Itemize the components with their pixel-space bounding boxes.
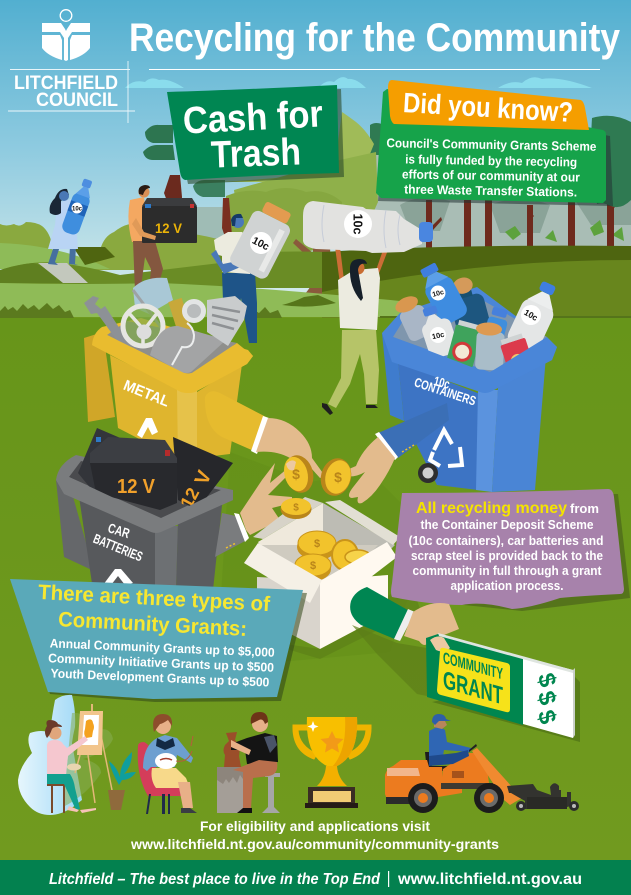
grant list: Youth Development Grants up to $500 bbox=[50, 666, 270, 690]
navy bottle bbox=[444, 274, 492, 339]
heading: cash for trash: Trash bbox=[210, 131, 302, 177]
figure: man carrying battery bbox=[128, 185, 197, 291]
batteries: 12 V bbox=[117, 476, 156, 498]
coin: $ bbox=[292, 466, 300, 482]
footer text bbox=[49, 871, 582, 888]
bin label bbox=[412, 373, 478, 409]
logo wordmark bbox=[14, 73, 118, 111]
ticket shadow bbox=[432, 672, 580, 742]
recycling money text bbox=[408, 500, 604, 593]
bin label: BATTERIES bbox=[91, 531, 145, 564]
jar with 10c label: 10c bbox=[250, 235, 271, 253]
ticket label text bbox=[443, 649, 503, 710]
back battery bbox=[78, 428, 125, 490]
bin front rim bbox=[92, 335, 253, 393]
footer text: Litchfield – The best place to live in the Top End bbox=[49, 871, 381, 888]
sage blob bbox=[63, 713, 113, 807]
bin right face bbox=[176, 496, 223, 590]
panel: cash for trash bbox=[167, 85, 344, 184]
grant list: Annual Community Grants up to $5,000 bbox=[50, 636, 275, 660]
figure: man carrying jar bbox=[211, 198, 298, 343]
artist figure bbox=[47, 736, 88, 774]
box right face bbox=[320, 575, 388, 649]
eligibility text bbox=[130, 818, 499, 852]
bin label: 10c bbox=[432, 373, 451, 392]
bottle with 10c label: 10c bbox=[350, 214, 364, 234]
bin centre strip bbox=[476, 390, 498, 492]
batteries bbox=[78, 428, 233, 511]
recycling symbol bbox=[103, 569, 133, 585]
heading: types of grants: There are three types of bbox=[38, 581, 271, 616]
recycling symbol bbox=[430, 430, 462, 466]
back flaps bbox=[253, 497, 323, 539]
potted plant bbox=[108, 752, 136, 810]
coins in box bbox=[295, 531, 371, 581]
wrench bbox=[84, 296, 135, 357]
battery: 12 V bbox=[155, 220, 183, 236]
bin rim back bbox=[56, 455, 233, 532]
arm: yellow sleeve with hand bbox=[205, 391, 325, 478]
vase bbox=[224, 732, 241, 767]
sky background bbox=[0, 0, 631, 300]
bin label: CONTAINERS bbox=[412, 375, 478, 409]
bin left strip bbox=[382, 333, 404, 421]
bin opening bbox=[107, 321, 237, 374]
illustration: artist painting bbox=[18, 695, 136, 815]
did you know body text bbox=[386, 136, 597, 200]
white bottle bbox=[416, 302, 460, 360]
illustration: trophy bbox=[293, 717, 371, 808]
contents: 10c bbox=[432, 289, 445, 299]
recycling money text: (10c containers), car batteries and bbox=[408, 534, 604, 548]
batteries: 12 bbox=[176, 484, 203, 511]
pedestal bbox=[217, 767, 246, 813]
coins in box: $ bbox=[314, 538, 320, 550]
title rule bbox=[149, 69, 600, 70]
bottle bbox=[60, 177, 97, 236]
dollar signs: $ bbox=[532, 688, 561, 709]
background trees bbox=[143, 112, 631, 303]
tree left bbox=[143, 125, 232, 269]
illustration: woman embroidering bbox=[138, 714, 197, 814]
heading: did you know: Did you know? bbox=[402, 87, 574, 128]
bin right face bbox=[197, 364, 242, 458]
bin label: CAR bbox=[106, 520, 132, 541]
box of coins bbox=[244, 497, 420, 659]
bin: 10c containers bbox=[382, 259, 565, 492]
footer bar bbox=[0, 860, 631, 895]
arm: blue sleeve with hand bbox=[342, 403, 449, 503]
bin: car batteries bbox=[56, 428, 233, 590]
bin left face bbox=[398, 362, 480, 490]
bin label bbox=[91, 520, 145, 564]
eligibility text: For eligibility and applications visit bbox=[200, 818, 430, 834]
recycling money text: community in full through a grant bbox=[412, 564, 602, 578]
logo wordmark: LITCHFIELD bbox=[14, 73, 118, 94]
backdrop blob bbox=[18, 695, 82, 815]
figure: woman lifting bottle bbox=[303, 201, 433, 415]
sweater bbox=[143, 735, 193, 771]
tan-capped bottle bbox=[474, 322, 505, 371]
dollar signs bbox=[532, 670, 561, 728]
bucket bbox=[133, 278, 173, 314]
illustration: ride-on mower bbox=[385, 714, 579, 813]
bin left strip bbox=[84, 332, 115, 422]
bin centre strip bbox=[177, 390, 197, 458]
left flap bbox=[244, 543, 322, 603]
gear stack bbox=[207, 296, 247, 346]
bottle with 10c label bbox=[303, 201, 433, 253]
grant list: Community Initiative Grants up to $500 bbox=[48, 651, 274, 675]
contents: 10c bbox=[522, 307, 540, 323]
recycling symbol bbox=[137, 418, 158, 438]
logo emblem bbox=[42, 10, 90, 61]
ticket white section bbox=[523, 657, 573, 738]
ladle bbox=[182, 299, 206, 323]
coins in box: $ bbox=[310, 560, 316, 572]
coin: $ bbox=[293, 502, 299, 514]
contents: 10c bbox=[431, 330, 445, 341]
figure: woman carrying bottle bbox=[48, 177, 97, 265]
bin opening bbox=[69, 461, 221, 518]
front battery bbox=[90, 437, 177, 465]
bin rim bbox=[92, 318, 253, 393]
heading: cash for trash bbox=[182, 93, 324, 177]
stool bbox=[262, 773, 280, 813]
did you know body text: Council's Community Grants Scheme bbox=[386, 136, 597, 154]
bin: metal bbox=[84, 278, 253, 460]
bin label: METAL bbox=[121, 377, 172, 411]
community grant ticket bbox=[426, 633, 580, 742]
bin front rim bbox=[56, 477, 233, 533]
bin left face bbox=[78, 490, 156, 590]
ground layers bbox=[0, 222, 631, 860]
did you know body text: three Waste Transfer Stations. bbox=[404, 182, 577, 200]
logo wordmark: COUNCIL bbox=[36, 90, 118, 111]
box left face bbox=[257, 577, 320, 649]
logo bbox=[8, 10, 135, 123]
arm: green sleeve with hand bbox=[350, 587, 459, 645]
grant list bbox=[47, 636, 275, 690]
recycling money text: the Container Deposit Scheme bbox=[420, 518, 594, 532]
ticket green section bbox=[426, 634, 523, 725]
did you know body text: efforts of our community at our bbox=[402, 167, 580, 185]
arm: grey sleeve with hand bbox=[215, 463, 292, 557]
forest right bbox=[370, 116, 631, 250]
figure: woman carrying bottle: 10c bbox=[72, 206, 83, 212]
red can bbox=[499, 333, 533, 371]
bin centre strip bbox=[155, 526, 178, 590]
dollar signs: $ bbox=[532, 707, 561, 728]
gold coins bbox=[280, 452, 355, 519]
thumb bbox=[430, 636, 450, 652]
needle bbox=[176, 736, 193, 761]
potter bbox=[231, 733, 278, 764]
eligibility text: www.litchfield.nt.gov.au/community/community-grants bbox=[130, 836, 499, 852]
bin front rim bbox=[382, 333, 557, 393]
panel: three types of grants bbox=[10, 579, 307, 702]
mower deck bbox=[507, 783, 579, 811]
right flap bbox=[322, 542, 397, 603]
wheel bbox=[418, 463, 438, 483]
footer text: www.litchfield.nt.gov.au bbox=[397, 871, 582, 888]
pale forest centre bbox=[197, 207, 225, 243]
blue bottle bbox=[415, 259, 470, 327]
embroidery hoop bbox=[155, 753, 177, 769]
did you know banner bbox=[388, 80, 589, 130]
scrap metal bbox=[84, 278, 247, 373]
big white bottle bbox=[504, 277, 565, 356]
beer can bbox=[446, 319, 483, 368]
bin right face bbox=[492, 356, 546, 492]
wheel bbox=[122, 305, 164, 347]
coin: $ bbox=[334, 469, 342, 485]
did you know body text: is fully funded by the recycling bbox=[405, 153, 577, 170]
arm shadow bbox=[352, 625, 427, 696]
thumb over coin bbox=[286, 460, 296, 470]
iron bbox=[150, 326, 226, 373]
ticket top edge bbox=[438, 633, 573, 673]
palette bbox=[67, 764, 81, 770]
mower body bbox=[385, 760, 462, 800]
bin opening bbox=[393, 297, 547, 372]
bin rim bbox=[382, 287, 557, 392]
wheel bbox=[474, 783, 504, 813]
box shadow bbox=[257, 579, 420, 659]
logo frame lines bbox=[8, 61, 135, 123]
legs bbox=[178, 782, 193, 808]
bin left strip bbox=[56, 480, 94, 571]
easel bbox=[75, 730, 112, 803]
recycling money text: application process. bbox=[450, 579, 564, 593]
recycling money text: All recycling money bbox=[416, 500, 567, 517]
inner walls bbox=[258, 503, 323, 593]
panel: recycling money bbox=[391, 489, 630, 611]
tree trunk centre bbox=[293, 239, 343, 303]
ticket label bbox=[437, 648, 510, 712]
ticket label text: GRANT bbox=[443, 666, 503, 710]
grey bottle bbox=[393, 292, 435, 343]
recycling money text: from bbox=[570, 501, 599, 516]
small blue bottle bbox=[483, 306, 511, 342]
chair bbox=[138, 742, 190, 796]
stool bbox=[47, 783, 67, 813]
dollar signs: $ bbox=[532, 670, 561, 691]
heading: cash for trash: Cash for bbox=[182, 93, 324, 143]
right battery bbox=[173, 437, 233, 510]
batteries: V bbox=[191, 467, 217, 488]
ticket label text: COMMUNITY bbox=[443, 649, 503, 683]
panel: did you know bbox=[376, 80, 613, 206]
contents bbox=[393, 259, 565, 371]
bin left face bbox=[110, 355, 180, 460]
skirt bbox=[152, 768, 190, 788]
recycling money text: scrap steel is provided back to the bbox=[411, 549, 603, 563]
heading: types of grants bbox=[38, 581, 271, 641]
illustration: potter bbox=[217, 712, 280, 813]
central tree foliage bbox=[222, 112, 378, 253]
clouds bbox=[125, 77, 592, 88]
seat bbox=[425, 752, 451, 772]
jar with 10c label bbox=[228, 198, 298, 281]
driver bbox=[429, 726, 471, 759]
wheel bbox=[408, 783, 438, 813]
heading: types of grants: Community Grants: bbox=[58, 608, 248, 641]
